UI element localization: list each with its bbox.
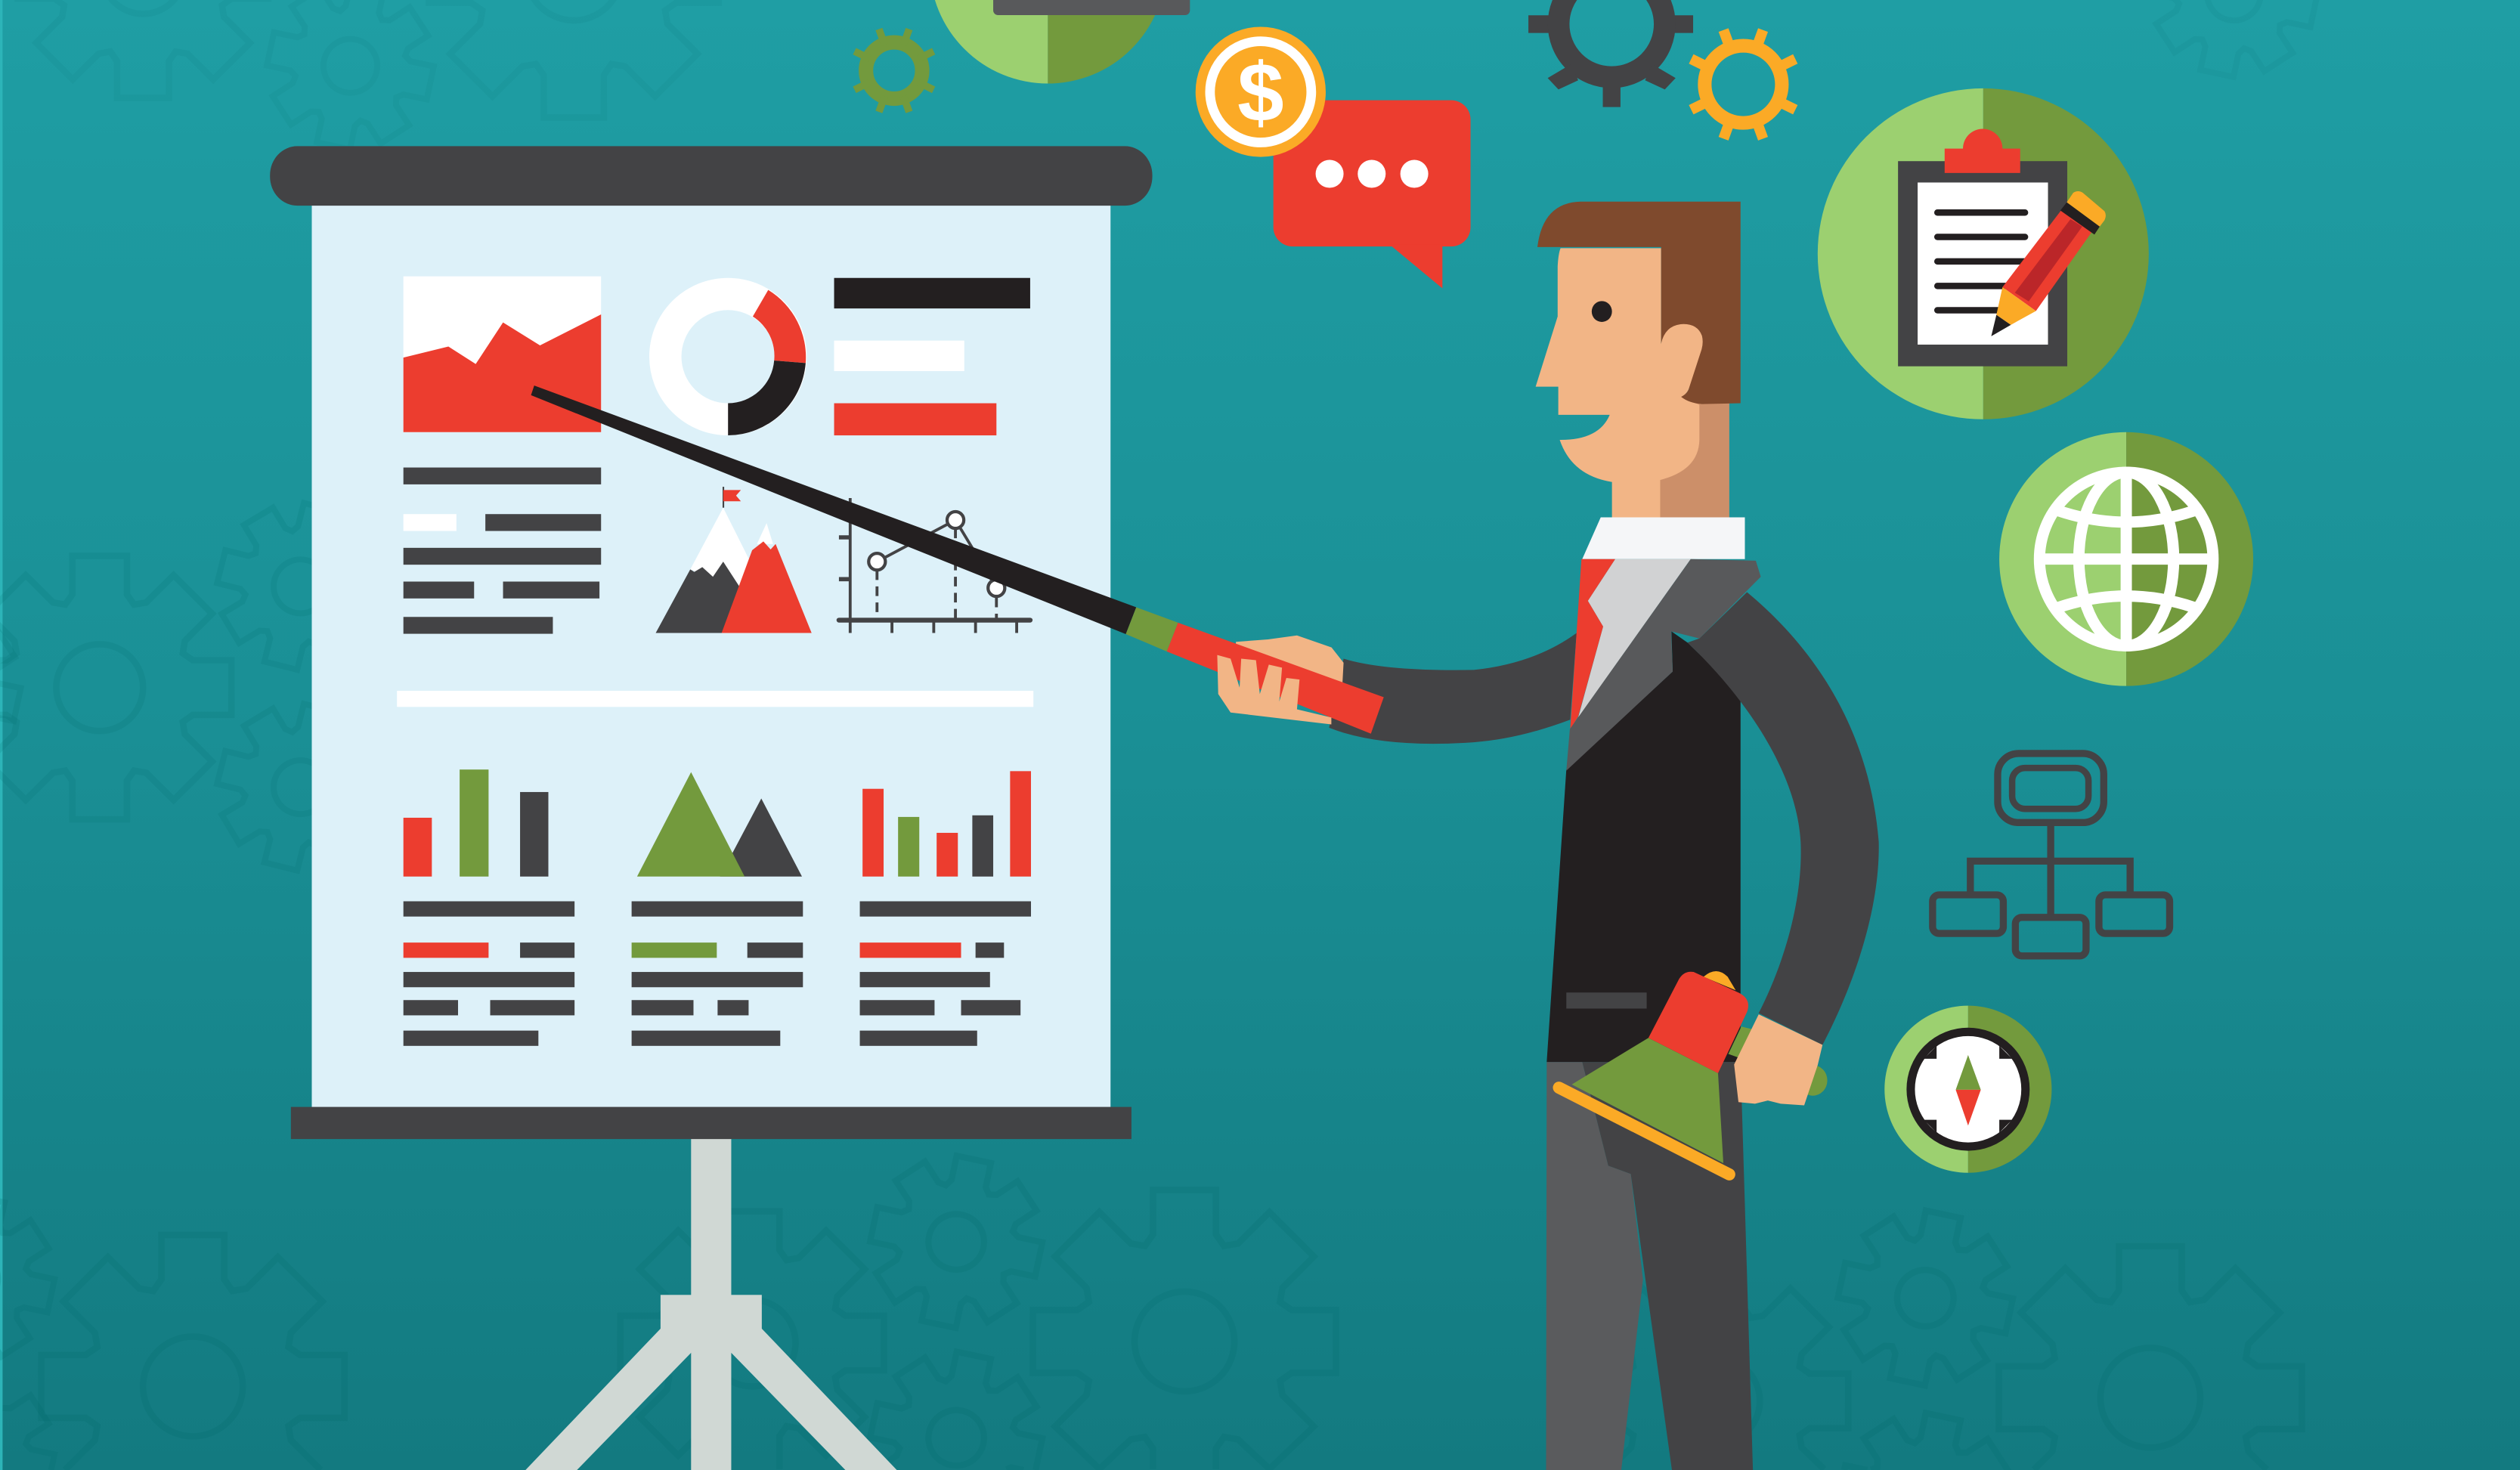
text lines: column 1: [404, 902, 574, 1046]
megaphone handle: [1729, 1026, 1828, 1096]
lapel: [1566, 559, 1761, 771]
area chart: [404, 277, 601, 432]
line chart with axes: [839, 498, 1030, 633]
board bottom tray: [291, 1107, 1132, 1139]
tie: [1570, 559, 1615, 729]
fingers over pointer: [1217, 655, 1331, 724]
collar: [1582, 517, 1744, 559]
icon: globe: [1999, 432, 2253, 686]
hand behind pointer: [1236, 636, 1344, 707]
megaphone: [1559, 971, 1748, 1174]
jacket body: [1546, 631, 1741, 1062]
icon: dark gear: [1528, 0, 1693, 107]
head: [1536, 248, 1699, 482]
speech bubble: [1274, 101, 1471, 289]
hand holding megaphone: [1734, 1014, 1822, 1105]
icon: dollar coin: $: [1237, 47, 1284, 139]
bar chart right: [862, 771, 1031, 877]
icon: compass: [1884, 1006, 2051, 1173]
jacket pocket: [1566, 992, 1647, 1009]
mountains with flag: [656, 487, 812, 633]
icon: dollar coin: [1196, 26, 1326, 157]
background gear pattern: bottom: [0, 1142, 2302, 1470]
background gear pattern: top: [18, 0, 2331, 162]
back arm: [1688, 593, 1879, 1045]
left edge highlight: [0, 0, 2, 1470]
ear: [1655, 324, 1703, 397]
legend bars: [834, 278, 1030, 435]
icon: clipboard with pencil: [1818, 88, 2149, 419]
board top roller: [270, 146, 1153, 206]
text lines: column 3: [860, 902, 1031, 1046]
shirt: [1578, 559, 1691, 717]
icon: org chart: [1933, 754, 2169, 956]
white divider: [397, 691, 1033, 707]
half circle icon at top: [930, 0, 1190, 84]
pointing arm sleeve: [1329, 633, 1577, 744]
hair: [1537, 202, 1741, 404]
icon: olive gear: [855, 29, 933, 112]
trousers: far leg: [1546, 1062, 1643, 1470]
background gear pattern: middle left: [0, 594, 18, 781]
bar chart left: [404, 769, 548, 877]
icon: orange gear: [1691, 30, 1795, 138]
donut chart: [665, 290, 806, 435]
trousers: near leg: [1582, 1062, 1753, 1470]
text lines: upper left: [404, 468, 601, 634]
eye: [1592, 301, 1612, 322]
neck: [1612, 394, 1729, 519]
text lines: column 2: [632, 902, 803, 1046]
presentation board: [270, 146, 1153, 1139]
triangle chart middle: [637, 772, 802, 877]
presenter: [531, 202, 1879, 1470]
pointer stick: [531, 385, 1384, 734]
board screen: [311, 193, 1110, 1109]
tripod stand: [525, 1133, 896, 1470]
